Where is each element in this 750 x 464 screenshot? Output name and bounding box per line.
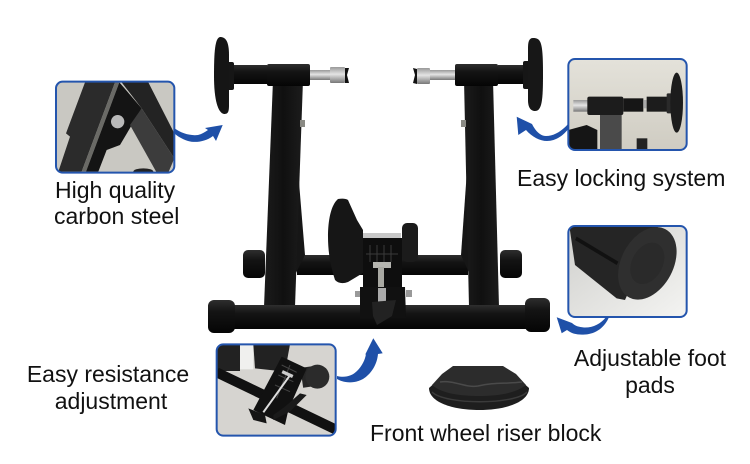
photo panel: locking system: [568, 59, 687, 150]
photo panel: resistance adjustment: [217, 344, 337, 436]
label: easy locking system: Easy locking system: [517, 165, 725, 191]
arrow: resistance adjustment: [337, 338, 383, 382]
label: easy resistance adjustment: adjustment: [55, 388, 168, 414]
label: front wheel riser block: Front wheel riser block: [370, 420, 602, 446]
resistance unit: [328, 199, 418, 325]
right axle assembly: [413, 38, 543, 111]
left axle assembly: [214, 37, 349, 114]
frame side bolts: [300, 120, 466, 127]
inner brace struts: [290, 170, 475, 275]
bike trainer stand: [208, 37, 550, 333]
rear end caps: [243, 250, 522, 278]
riser block: [429, 366, 529, 410]
label: easy resistance adjustment: Easy resistance: [27, 361, 189, 387]
rear crossbar: [297, 255, 468, 275]
arrow: carbon steel: [174, 125, 223, 142]
arrow: locking system: [517, 117, 569, 141]
right leg: [464, 80, 499, 307]
photo panel: carbon steel: [56, 82, 174, 175]
label: adjustable foot pads: Adjustable foot: [574, 345, 726, 371]
arrow: foot pads: [557, 317, 609, 335]
photo panel: foot pads: [568, 217, 688, 317]
front end caps: [208, 298, 550, 333]
label: adjustable foot pads: pads: [625, 372, 675, 398]
left leg: [264, 80, 303, 307]
label: high quality carbon steel: carbon steel: [54, 203, 179, 229]
front crossbar: [233, 305, 526, 329]
label: high quality carbon steel: High quality: [55, 177, 175, 203]
